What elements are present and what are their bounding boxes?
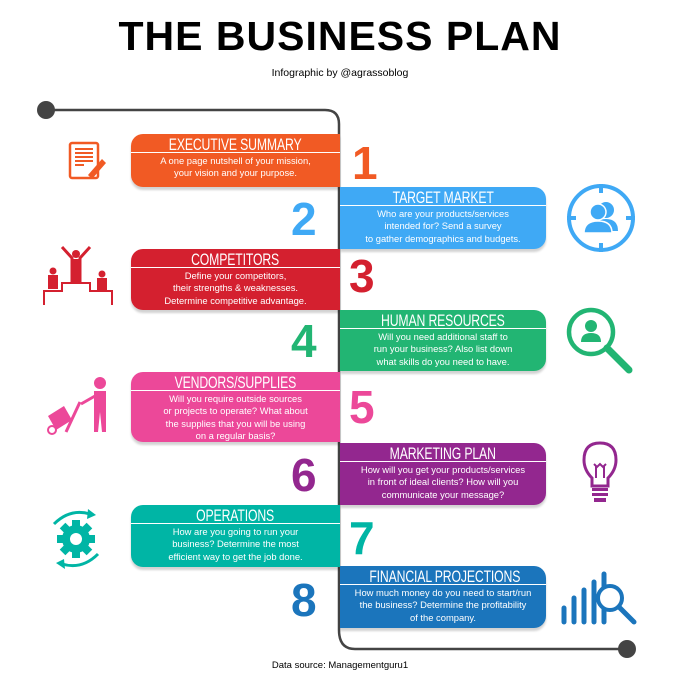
card: financial projections: How much money do you need to start/run — [355, 587, 531, 598]
number 8: 8 — [291, 574, 317, 626]
number 2: 2 — [291, 193, 317, 245]
card: competitors — [131, 249, 340, 310]
icon: document — [68, 142, 106, 180]
card: competitors: their strengths & weaknesses. — [173, 282, 298, 293]
card: executive summary: your vision and your purpose. — [174, 167, 297, 178]
card: target market: TARGET MARKET — [392, 188, 494, 207]
card: operations — [131, 505, 340, 567]
card: operations: OPERATIONS — [197, 506, 274, 525]
number 4: 4 — [291, 315, 317, 367]
icon: magnifier person — [566, 308, 632, 374]
icon: lightbulb — [582, 442, 618, 502]
card: vendors/supplies: the supplies that you will be using — [166, 418, 305, 429]
card: financial projections — [340, 566, 546, 628]
card: competitors: Define your competitors, — [185, 270, 286, 281]
card: operations: How are you going to run your — [173, 526, 298, 537]
number 1: 1 — [352, 137, 378, 189]
card: financial projections: the business? Determine the profitability — [360, 599, 526, 610]
card: vendors/supplies — [131, 372, 340, 442]
card: executive summary — [131, 134, 340, 187]
card: marketing plan: MARKETING PLAN — [390, 444, 496, 463]
title: THE BUSINESS PLAN — [118, 13, 562, 59]
number 6: 6 — [291, 449, 317, 501]
card: operations: business? Determine the most — [172, 538, 299, 549]
card: human resources — [340, 310, 546, 371]
card: target market: to gather demographics and budgets. — [365, 233, 521, 244]
number 7: 7 — [349, 512, 375, 564]
card: competitors: Determine competitive advantage. — [164, 295, 307, 306]
icon: gear cycle — [53, 509, 99, 569]
card: financial projections: of the company. — [410, 612, 476, 623]
subtitle: Infographic by @agrassoblog — [272, 67, 408, 79]
card: marketing plan: communicate your message? — [382, 489, 504, 500]
card: vendors/supplies: VENDORS/SUPPLIES — [175, 373, 296, 392]
icon: podium — [43, 246, 113, 305]
card: human resources: run your business? Also list down — [374, 343, 512, 354]
card: human resources: what skills do you need to have. — [377, 356, 509, 367]
card: human resources: HUMAN RESOURCES — [381, 311, 505, 330]
card: target market: Who are your products/services — [377, 208, 509, 219]
card: operations: efficient way to get the job done. — [168, 551, 303, 562]
icon: hand truck — [47, 377, 106, 435]
icon: bar chart magnifier — [562, 572, 636, 624]
card: marketing plan: How will you get your products/services — [361, 464, 525, 475]
card: human resources: Will you need additional staff to — [378, 331, 508, 342]
card: target market — [340, 187, 546, 249]
icon: target people — [567, 184, 635, 252]
card: competitors: COMPETITORS — [192, 250, 279, 269]
card: marketing plan — [340, 443, 546, 505]
card: marketing plan: in front of ideal clients? How will you — [368, 476, 518, 487]
card: financial projections: FINANCIAL PROJECTIONS — [369, 567, 520, 586]
footer: data source: Data source: Managementguru1 — [272, 660, 408, 671]
card: executive summary: EXECUTIVE SUMMARY — [169, 135, 302, 154]
card: executive summary: A one page nutshell of your mission, — [160, 155, 311, 166]
card: target market: intended for? Send a survey — [384, 220, 502, 231]
card: vendors/supplies: on a regular basis? — [196, 430, 275, 441]
card: vendors/supplies: or projects to operate? What about — [163, 405, 308, 416]
card: vendors/supplies: Will you require outside sources — [169, 393, 302, 404]
number 5: 5 — [349, 381, 375, 433]
number 3: 3 — [349, 250, 375, 302]
